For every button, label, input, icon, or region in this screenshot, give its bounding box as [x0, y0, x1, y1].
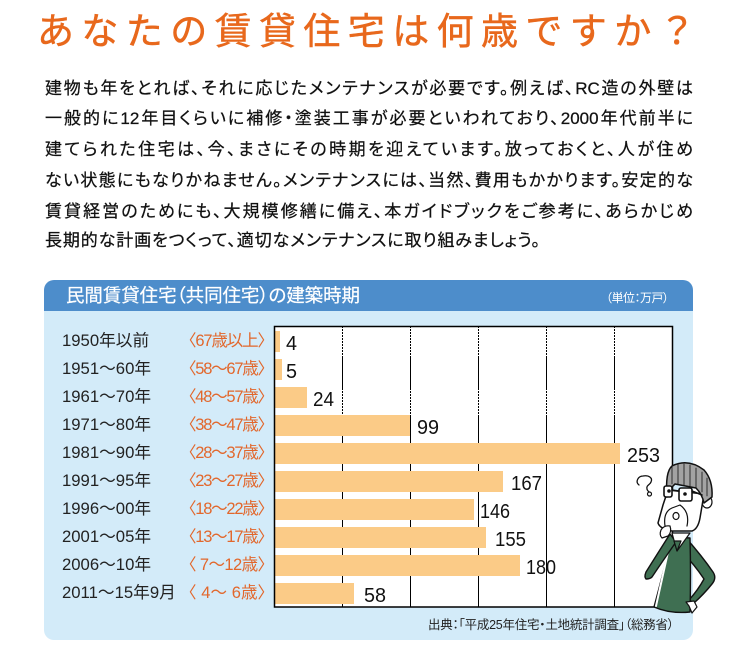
- question mark: [637, 476, 652, 492]
- intro text block: 建てられた住宅は、今、まさにその時期を迎えています。放っておくと、人が住め: [45, 140, 693, 159]
- left arm: [645, 534, 676, 579]
- building age labels: [180, 331, 274, 602]
- chart heading: 民間賃貸住宅（共同住宅）の建築時期: [66, 285, 360, 306]
- year labels: 1991～95年: [62, 471, 151, 490]
- body: [654, 537, 690, 612]
- source note: 出典：「平成25年住宅・土地統計調査」（総務省）: [428, 617, 674, 632]
- building age labels: 〈38～47歳〉: [180, 415, 274, 434]
- collar: [672, 533, 690, 551]
- year labels: 1951～60年: [62, 359, 151, 378]
- bar values: 180: [526, 557, 556, 579]
- face: [658, 490, 704, 531]
- bar values: 5: [286, 361, 297, 383]
- building age labels: 〈67歳以上〉: [180, 331, 274, 350]
- bar values: 58: [364, 585, 386, 607]
- hand at hip: [686, 601, 697, 613]
- panel header bar: [44, 280, 693, 311]
- building age labels: 〈58～67歳〉: [180, 359, 274, 378]
- year labels: 1950年以前: [62, 331, 149, 350]
- bar values: 99: [417, 417, 439, 439]
- bar values: 146: [480, 501, 510, 523]
- intro text block: [45, 79, 693, 250]
- year labels: 1996～00年: [62, 499, 151, 518]
- panel background: [44, 311, 693, 640]
- building age labels: 〈23～27歳〉: [180, 471, 274, 490]
- intro text block: ない状態にもなりかねません。メンテナンスには、当然、費用もかかります。安定的な: [45, 171, 693, 190]
- bar chart: [274, 326, 673, 607]
- bar values: 155: [495, 529, 526, 551]
- mouth and cheeks: [665, 505, 688, 526]
- year labels: 2001～05年: [62, 527, 151, 546]
- year labels: 2011～15年9月: [62, 583, 176, 602]
- ear: [702, 496, 712, 508]
- year labels: 1971～80年: [62, 415, 151, 434]
- white stripe: [656, 552, 668, 606]
- building age labels: 〈48～57歳〉: [180, 387, 274, 406]
- bar values: 24: [313, 389, 334, 411]
- building age labels: 〈18～22歳〉: [180, 499, 274, 518]
- intro text block: 建物も年をとれば、それに応じたメンテナンスが必要です。例えば、RC造の外壁は: [45, 79, 693, 98]
- hand at chin: [660, 526, 671, 538]
- building age labels: 〈13～17歳〉: [180, 527, 274, 546]
- hair: [667, 463, 712, 503]
- bar values: 253: [627, 445, 660, 467]
- bar values: [286, 333, 660, 607]
- building age labels: 〈 7～12歳〉: [180, 555, 274, 574]
- year labels: 1981～90年: [62, 443, 151, 462]
- unit label: （単位：万戸）: [606, 291, 669, 305]
- bar values: 167: [511, 473, 542, 495]
- glasses: [664, 486, 702, 501]
- year labels: 2006～10年: [62, 555, 151, 574]
- title: あなたの賃貸住宅は何歳ですか？: [37, 11, 703, 52]
- right arm: [682, 538, 715, 603]
- building age labels: 〈 4～ 6歳〉: [180, 583, 274, 602]
- intro text block: 賃貸経営のためにも、大規模修繕に備え、本ガイドブックをご参考に、あらかじめ: [45, 202, 693, 221]
- year labels: [62, 331, 176, 602]
- intro text block: 長期的な計画をつくって、適切なメンテナンスに取り組みましょう。: [45, 231, 540, 250]
- intro text block: 一般的に12年目くらいに補修・塗装工事が必要といわれており、2000年代前半に: [45, 109, 693, 128]
- building age labels: 〈28～37歳〉: [180, 443, 274, 462]
- bar values: 4: [286, 333, 297, 355]
- illustration: thinking man: [637, 463, 715, 613]
- year labels: 1961～70年: [62, 387, 151, 406]
